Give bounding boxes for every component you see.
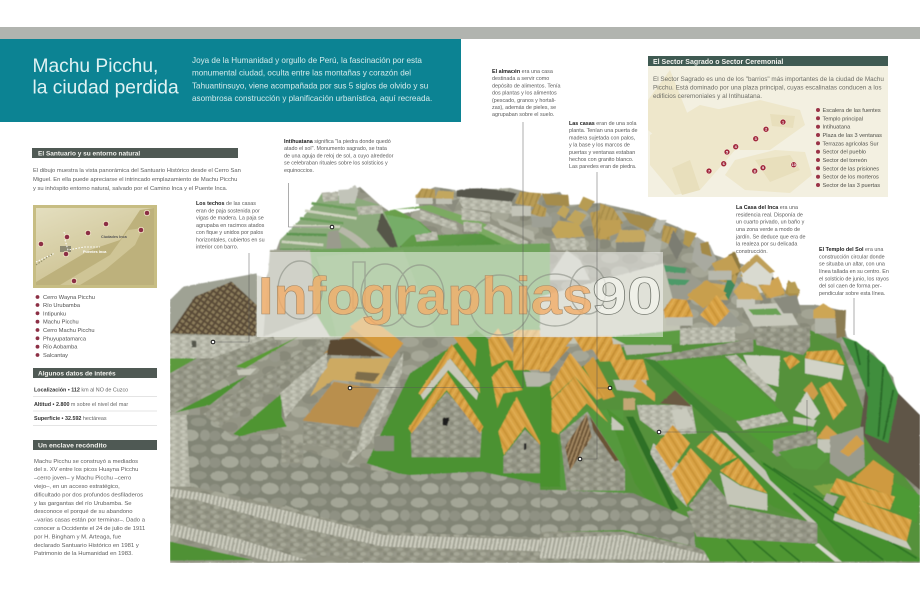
callout: Intihuatana: se celebraban rituales sobre los solsticios y <box>284 161 388 167</box>
walls <box>680 327 735 345</box>
map legend: Intipunku <box>43 311 66 317</box>
panel: El Santuario y su entorno natural <box>32 148 241 359</box>
callout: Los techos: vigas de madera. La paja se <box>196 216 264 222</box>
text: sector sagrado: Picchu. Está dominado por una plaza principal, cuyas escalinatas conducen a los <box>653 84 882 91</box>
text: enclave: Machu Picchu se construyó a mediados <box>34 459 138 465</box>
intro text: asombrosa construcción y planificación urbanística, aquí recreada. <box>192 94 432 103</box>
callout: Intihuatana: de una aguja de reloj de sol, a cuyo alrededor <box>284 153 394 159</box>
callout: El Templo del Sol: pendicular sobre esta línea. <box>819 291 885 297</box>
callout: Los techos: Los techos de las casas <box>196 201 256 207</box>
heading: santuario: El Santuario y su entorno natural <box>38 150 140 157</box>
illustration: Machu Picchu panorama <box>170 185 920 563</box>
plaza and upper terraces behind <box>250 273 413 340</box>
map markers <box>38 210 150 284</box>
callout: El Templo del Sol: el solsticio de junio, los rayos <box>819 276 889 282</box>
text: santuario: El dibujo muestra la vista panorámica del Santuario Histórico desde el Cerro San <box>33 168 241 174</box>
callout: El almacén: zas), además de pieles, se <box>492 105 556 111</box>
thatched hut roof <box>170 282 257 336</box>
text: enclave: conocer a Occidente el 24 de julio de 1911 <box>34 526 145 532</box>
data rows: Superficie • 32.592 hectáreas <box>34 416 107 422</box>
callout: El almacén: agrupaban sobre el suelo. <box>492 112 554 118</box>
text: sector sagrado: edificios ceremoniales y al Intihuatana. <box>653 93 762 100</box>
mountain silhouette base <box>170 187 920 563</box>
central gabled houses <box>408 328 550 473</box>
plan markers: 7 <box>708 169 710 173</box>
sector legend: Sector de los morteros <box>822 175 879 181</box>
left section: hut, walls, open building, central houses <box>170 243 550 562</box>
watermark ghost rings <box>278 261 606 335</box>
header banner <box>0 39 461 122</box>
plan markers <box>706 119 797 174</box>
sector legend: Sector del pueblo <box>822 150 866 156</box>
big front house <box>550 353 625 491</box>
callout: Los techos: interior con barro. <box>196 244 238 250</box>
callout: El Templo del Sol: línea tallada en su centro. En <box>819 269 889 275</box>
plan markers: 2 <box>765 128 767 132</box>
stairway <box>170 488 550 562</box>
watermark overlay panel <box>257 252 663 337</box>
ridge houses, upper right <box>600 203 800 300</box>
central courtyard building <box>637 405 697 435</box>
text: santuario: y su inhóspito entorno natural, salvado por el Camino Inca y el Puente Inca. <box>33 186 228 192</box>
right section: roofs, terraces, houses, rock <box>540 254 920 562</box>
lower orange roofed houses <box>650 425 767 511</box>
map legend: Cerro Wayna Picchu <box>43 295 95 301</box>
upper houses <box>663 298 693 318</box>
text: sector sagrado: El Sector Sagrado es uno de los "barrios" más importantes de la ciudad de Machu <box>653 76 884 83</box>
callout: La Casa del Inca: construcción. <box>736 249 768 255</box>
intro text: monumental ciudad, oculta entre las montañas y corazón del <box>192 69 411 78</box>
location map: Puentes Inca <box>83 250 107 254</box>
callout: La Casa del Inca: una zona verde a modo de <box>736 227 800 233</box>
title: Machu Picchu, <box>32 56 158 77</box>
callout: La Casa del Inca: residencia real. Disponía de <box>736 212 803 218</box>
heading: sector sagrado <box>648 56 888 66</box>
open storehouse <box>280 315 403 465</box>
callout: La Casa del Inca: jardín. Se deduce que era de <box>735 234 806 240</box>
data rows: Localización • 112 km al NO de Cuzco <box>34 388 128 394</box>
sector plan map <box>648 70 812 195</box>
plan markers: 1 <box>782 120 784 124</box>
text: enclave: –cerro joven– y Machu Picchu –cerro <box>34 476 132 482</box>
title: la ciudad perdida <box>32 78 179 98</box>
sector legend: Terrazas agrícolas Sur <box>822 141 879 147</box>
intro text: Joya de la Humanidad y orgullo de Perú, la fascinación por esta <box>192 56 422 65</box>
hilltop building <box>322 192 338 202</box>
callout: Las casas: Las casas eran de una sola <box>569 121 636 127</box>
map legend: Salcantay <box>43 353 68 359</box>
terrace walls and grass strips <box>170 336 277 412</box>
heading: sector sagrado: El Sector Sagrado o Sector Ceremonial <box>653 59 783 66</box>
upper terrace wall and lawn <box>540 263 680 345</box>
big stone block <box>170 415 285 507</box>
text: enclave: del s. XV entre los picos Huayna Picchu <box>34 467 138 473</box>
location map <box>34 206 156 286</box>
sector legend: Sector de las 3 puertas <box>822 183 880 189</box>
callout: Intihuatana: equinoccios. <box>284 168 314 174</box>
callout: El Templo del Sol: El Templo del Sol era una <box>819 247 883 253</box>
sector legend: Templo principal <box>822 116 863 122</box>
callout: El almacén: (pescado, granos y hortali- <box>492 98 556 104</box>
rock outcrop <box>547 250 590 280</box>
green behind central houses <box>367 330 550 487</box>
callout: Intihuatana: Intihuatana significa "la piedra donde quedó <box>284 139 391 145</box>
text: enclave: Patrimonio de la Humanidad en 1983. <box>34 551 133 557</box>
plan markers: 6 <box>723 162 725 166</box>
plan markers: 9 <box>762 166 764 170</box>
plan markers: 5 <box>726 150 728 154</box>
lower terraces <box>697 537 840 562</box>
watermark number: 90 <box>592 267 662 326</box>
data rows <box>33 388 157 426</box>
green strips <box>607 408 670 517</box>
sector legend: Sector de las prisiones <box>822 166 879 172</box>
callout: Las casas: Las paredes eran de piedra. <box>569 164 636 170</box>
callout: Los techos: horizontales, cubiertos en su <box>196 237 265 243</box>
callout: Las casas: puertas y ventanas estaban <box>569 150 635 156</box>
text: enclave: viejo–, en un acceso estratégico, <box>34 484 120 490</box>
stacked roofs, left <box>540 337 573 355</box>
heading: datos: Algunos datos de interés <box>38 370 116 378</box>
map legend: Río Urubamba <box>43 303 81 309</box>
map legend: Río Aobamba <box>43 345 78 351</box>
data rows: Altitud • 2.800 m sobre el nivel del mar <box>34 402 128 408</box>
location map: Ciudades Inca <box>101 235 128 239</box>
callout: El almacén: depósito de alimentos. Tenía <box>492 83 561 89</box>
callout: Las casas: planta. Tenían una puerta de <box>569 128 638 134</box>
callout: Los techos: con fique y unidos por palos <box>196 230 263 236</box>
callout: La Casa del Inca: La Casa del Inca era una <box>736 205 798 211</box>
map legend: Machu Picchu <box>43 320 79 326</box>
plan markers: 3 <box>755 137 757 141</box>
text: santuario: Miguel. En ella puede apreciarse el intrincado emplazamiento de Machu Picchu <box>33 177 237 183</box>
callout: El almacén: destinada a servir como <box>492 76 549 82</box>
hut wall <box>170 335 277 358</box>
top grey band <box>0 27 920 39</box>
watermark text: Infographias <box>258 267 593 326</box>
courtyard on upper ridge <box>742 303 798 327</box>
dark rock <box>842 337 920 490</box>
plan markers: 4 <box>735 145 738 149</box>
panel: El Sector Sagrado <box>648 56 888 197</box>
callout: Los techos: eran de paja sostenida por <box>196 208 260 214</box>
text: enclave: declarado Santuario Histórico en 1981 y <box>34 543 139 549</box>
distant mountain <box>170 273 257 337</box>
callout: El Templo del Sol: construcción circular donde <box>819 254 885 260</box>
lawn <box>657 358 782 421</box>
sector legend: Escalera de las fuentes <box>822 108 881 114</box>
map legend: Phuyupatamarca <box>43 336 87 342</box>
text: enclave: desconoce el porqué de su abandono <box>34 509 133 515</box>
callout: La Casa del Inca: la realeza por su delicada <box>736 242 797 248</box>
lower retaining wall <box>280 443 550 538</box>
callout: El almacén: dos plantas y los alimentos <box>492 91 557 97</box>
sector legend: Plaza de las 3 ventanas <box>822 133 882 139</box>
lower walls <box>540 490 695 547</box>
intro text: Tahuantinsuyo, viene acompañada por sus 5 siglos de olvido y su <box>192 81 428 90</box>
houses on the upper terrace <box>415 188 435 199</box>
sector legend <box>816 108 882 189</box>
callout: Las casas: madera sujetada con palos, <box>569 135 636 141</box>
grass bottom left <box>170 542 253 561</box>
callout: El Templo del Sol: se situaba un altar, con una <box>819 262 885 268</box>
callout: Intihuatana: atado el sol". Monumento sagrado, se trata <box>284 146 387 152</box>
hillside, upper left terraces <box>280 185 610 337</box>
heading: enclave: Un enclave recóndito <box>38 442 107 450</box>
bottom right roofs <box>813 460 920 550</box>
central green slope <box>384 209 533 310</box>
text: enclave: por H. Bingham y M. Arteaga, fue <box>34 534 122 540</box>
callout: Los techos: agrupaba en racimos atados <box>196 223 265 229</box>
callout: El Templo del Sol: del sol caen de forma per- <box>819 284 882 290</box>
text: enclave: dificultado por dos profundos desfiladeros <box>34 492 143 498</box>
callout: El almacén: El almacén era una casa <box>492 69 553 75</box>
panel: Un enclave recóndito <box>33 440 157 557</box>
callout dots <box>211 225 661 461</box>
plan markers: 10 <box>792 163 796 167</box>
plan markers: 8 <box>754 169 756 173</box>
map legend <box>36 295 95 359</box>
sector legend: Intihuatana <box>822 125 851 131</box>
sector legend: Sector del torreón <box>822 158 867 164</box>
leader lines <box>213 122 854 459</box>
text: enclave: y las gargantas del río Urubamba. Se <box>34 501 132 507</box>
map legend: Cerro Machu Picchu <box>43 328 95 334</box>
panel: Algunos datos de interés <box>33 368 157 426</box>
callout: Las casas: hechos con granito blanco. <box>569 157 633 163</box>
text: enclave: –varias casas están por terminar–. Dado a <box>34 518 146 524</box>
heading: santuario <box>32 148 238 158</box>
callout: Las casas: y la base y los marcos de <box>569 143 630 149</box>
callout: La Casa del Inca: un cuarto privado, un baño y <box>736 220 805 226</box>
